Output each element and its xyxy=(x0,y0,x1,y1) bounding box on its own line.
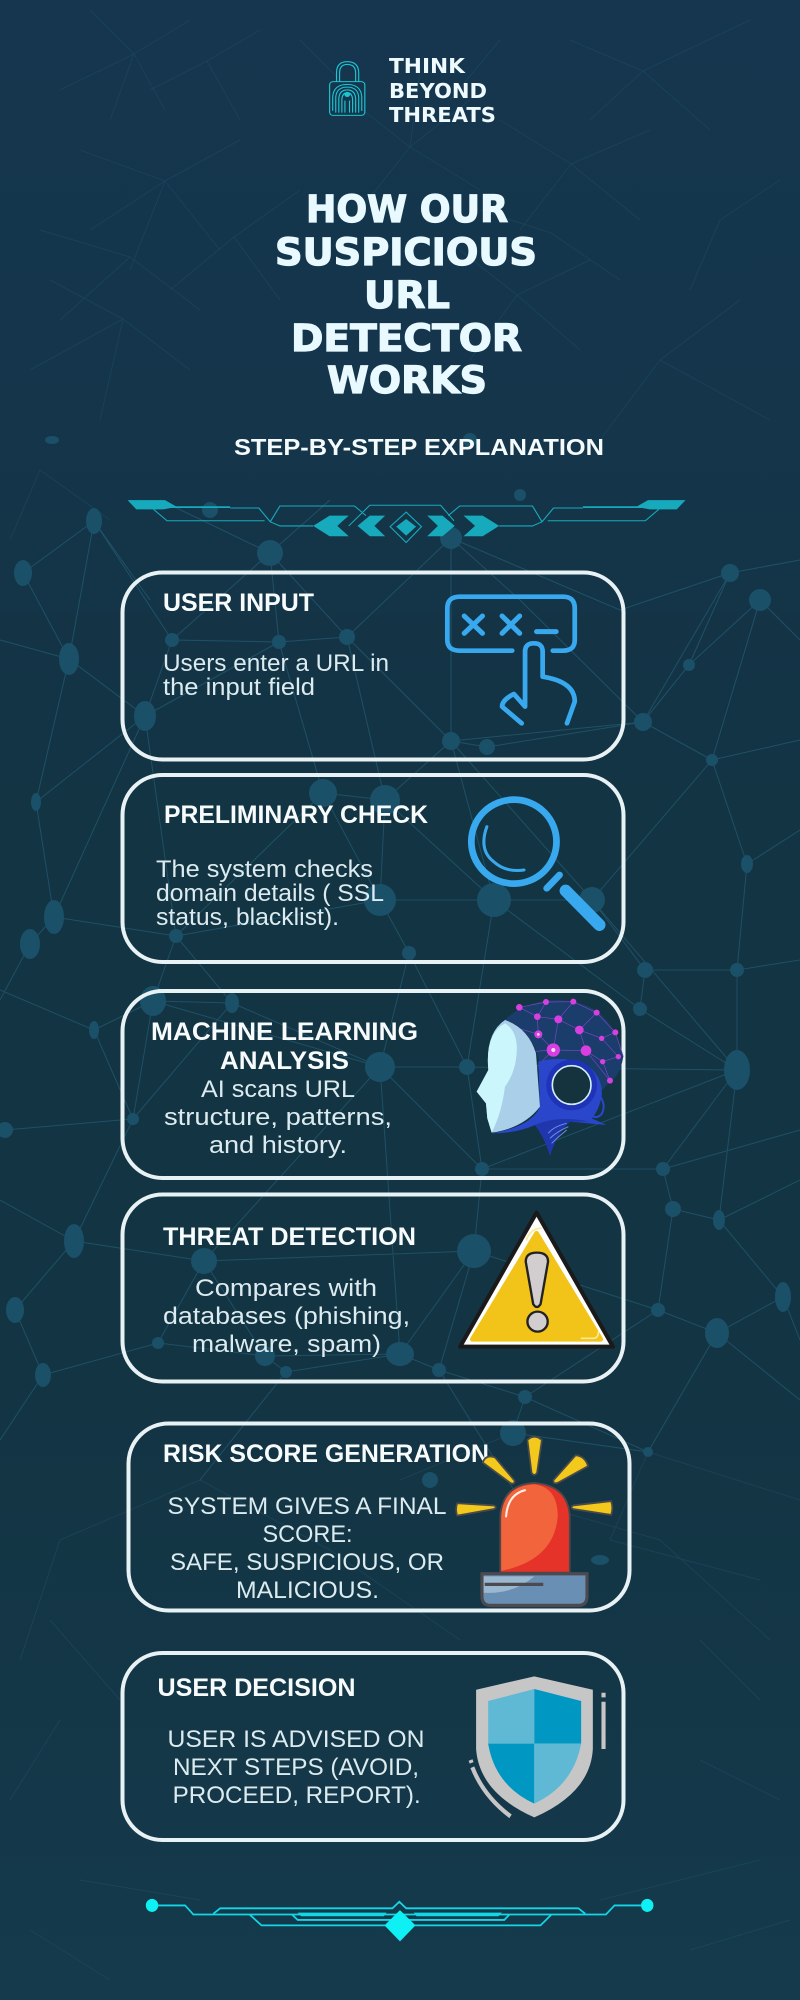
heading: risk score generation: RISK SCORE GENERATION xyxy=(163,1440,489,1468)
text: preliminary check description: domain details ( SSL xyxy=(156,880,384,907)
text: risk score description: SYSTEM GIVES A FINAL xyxy=(168,1493,446,1520)
icon: AI robot head xyxy=(477,999,623,1156)
title: SUSPICIOUS xyxy=(275,231,537,274)
panel: machine learning analysis xyxy=(122,991,624,1178)
icon: magnifying glass xyxy=(471,800,599,925)
icon: pointing hand on input field xyxy=(447,597,575,723)
title xyxy=(275,188,537,402)
face xyxy=(477,1020,540,1133)
text: user decision description: NEXT STEPS (AVOID, xyxy=(173,1754,419,1781)
panel: user decision xyxy=(122,1653,624,1840)
text: risk score description: SCORE: xyxy=(262,1521,352,1548)
text: user input description xyxy=(163,650,389,701)
heading: user decision: USER DECISION xyxy=(158,1674,356,1702)
text: risk score description: SAFE, SUSPICIOUS, OR xyxy=(170,1549,444,1576)
panel: risk score generation xyxy=(128,1424,630,1610)
text: user input description: the input field xyxy=(163,674,315,701)
heading: threat detection: THREAT DETECTION xyxy=(163,1223,416,1251)
panel: preliminary check xyxy=(122,775,624,962)
title: WORKS xyxy=(327,359,487,402)
text: threat detection description: Compares with xyxy=(195,1275,377,1302)
neural network dots xyxy=(505,999,623,1100)
title: URL xyxy=(364,274,450,317)
text: machine learning description: structure, patterns, xyxy=(164,1104,392,1131)
text: threat detection description xyxy=(163,1275,410,1358)
subtitle: STEP-BY-STEP EXPLANATION xyxy=(234,434,604,460)
text: machine learning description: and history. xyxy=(209,1132,347,1159)
text: threat detection description: databases (phishing, xyxy=(163,1303,410,1330)
icon: red alarm siren xyxy=(456,1437,612,1605)
text: user decision description xyxy=(168,1726,424,1809)
panel: threat detection xyxy=(122,1194,624,1382)
text: user decision description: USER IS ADVISED ON xyxy=(168,1726,424,1753)
title: DETECTOR xyxy=(291,317,522,360)
heading: machine learning analysis: MACHINE LEARNING xyxy=(151,1018,418,1046)
icon: fingerprint padlock xyxy=(330,62,365,115)
text: preliminary check description xyxy=(156,856,384,931)
heading: preliminary check: PRELIMINARY CHECK xyxy=(164,801,428,829)
text: risk score description: MALICIOUS. xyxy=(236,1577,379,1604)
bottom tech divider xyxy=(146,1899,653,1941)
heading: machine learning analysis xyxy=(151,1018,418,1075)
icon: security shield xyxy=(471,1676,604,1817)
text: machine learning description xyxy=(164,1076,392,1159)
panel: user input xyxy=(122,572,624,760)
logo wordmark xyxy=(389,54,496,127)
text: risk score description xyxy=(168,1493,446,1604)
robot head back and neck xyxy=(492,1059,607,1156)
text: preliminary check description: The system checks xyxy=(156,856,373,883)
top tech divider with chevrons xyxy=(128,500,686,542)
icon: warning triangle xyxy=(460,1213,613,1347)
text: preliminary check description: status, blacklist). xyxy=(156,904,339,931)
logo: Think Beyond Threats xyxy=(330,54,496,127)
heading: user input: USER INPUT xyxy=(163,589,314,617)
text: user input description: Users enter a URL in xyxy=(163,650,389,677)
title: HOW OUR xyxy=(306,188,508,231)
text: machine learning description: AI scans URL xyxy=(201,1076,355,1103)
text: user decision description: PROCEED, REPORT). xyxy=(173,1782,421,1809)
logo wordmark: THINK xyxy=(389,54,467,78)
logo wordmark: BEYOND xyxy=(389,79,487,103)
heading: machine learning analysis: ANALYSIS xyxy=(220,1047,349,1075)
logo wordmark: THREATS xyxy=(389,103,496,127)
text: threat detection description: malware, spam) xyxy=(192,1331,381,1358)
